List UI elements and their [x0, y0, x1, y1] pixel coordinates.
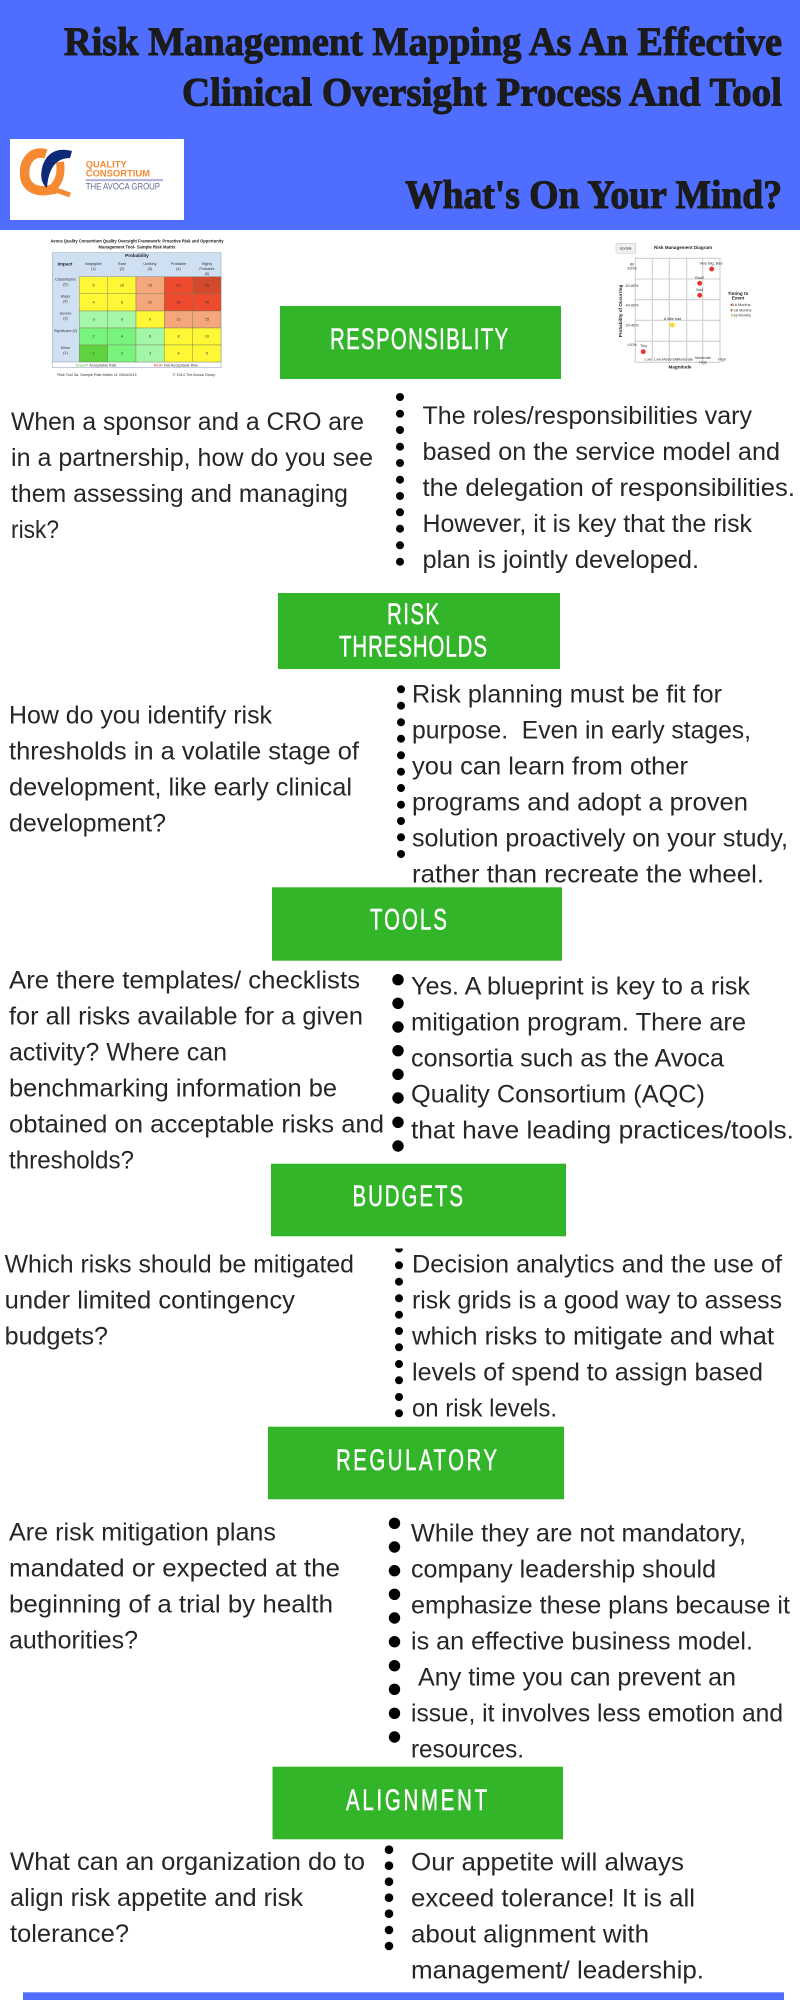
answer text: based on the service model and — [422, 438, 780, 466]
panel: risk thresholds Q and A — [9, 680, 788, 888]
dotted divider — [385, 1845, 393, 1950]
panel: budgets Q and A — [5, 1248, 782, 1422]
subtitle: What's On Your Mind? — [405, 172, 782, 217]
question text: authorities? — [9, 1627, 138, 1655]
answer text — [411, 1519, 790, 1763]
question text — [10, 1848, 365, 1948]
question text — [9, 966, 384, 1174]
risk matrix image: 4 — [121, 334, 123, 338]
risk management diagram image: High — [699, 360, 707, 364]
answer text: company leadership should — [411, 1555, 716, 1583]
risk matrix image: (1) — [91, 267, 97, 271]
dotted divider — [389, 1518, 400, 1743]
answer text: However, it is key that the risk — [422, 510, 752, 538]
answer text: you can learn from other — [412, 752, 688, 780]
answer text: The roles/responsibilities vary — [422, 402, 753, 430]
dotted divider — [397, 685, 405, 858]
section heading: Risk Thresholds: THRESHOLDS — [339, 631, 487, 664]
answer text: exceed tolerance! It is all — [411, 1885, 695, 1913]
title — [64, 19, 782, 115]
answer text: plan is jointly developed. — [422, 546, 699, 574]
risk management diagram image: 0-6 Months — [732, 303, 751, 307]
question text: beginning of a trial by health — [9, 1591, 333, 1619]
risk management diagram image: Tiny — [640, 344, 647, 348]
question text: benchmarking information be — [9, 1074, 337, 1102]
risk matrix image: Red= Not Acceptable Risk — [154, 363, 198, 367]
risk management diagram image: 100% — [627, 266, 637, 270]
risk matrix image: 3 — [92, 318, 95, 322]
risk management diagram image: Bad2 — [695, 276, 704, 280]
risk management diagram image: 40-60% — [625, 304, 639, 308]
section heading: Tools — [272, 887, 562, 961]
question text: How do you identify risk — [9, 701, 272, 729]
risk matrix image: 5 — [92, 284, 95, 288]
question text: thresholds in a volatile stage of — [9, 737, 359, 765]
risk management diagram image: Low Moderate — [654, 358, 678, 362]
risk matrix image: (4) — [176, 267, 182, 271]
risk matrix image: 2 — [121, 352, 123, 356]
risk matrix image: 1 — [92, 352, 95, 356]
risk management diagram image: 80 — [630, 262, 634, 266]
answer text: that have leading practices/tools. — [411, 1116, 794, 1144]
risk matrix image: 20 — [205, 300, 209, 304]
risk matrix image: (4) — [63, 300, 69, 304]
panel: tools Q and A — [9, 966, 794, 1174]
question text: Are there templates/ checklists — [9, 966, 360, 994]
section heading: Risk Thresholds — [278, 593, 560, 669]
risk matrix image: Unlikely — [143, 262, 157, 266]
risk matrix image: Probability — [125, 253, 149, 258]
logo: Avoca Quality Consortium: CONSORTIUM — [86, 168, 150, 180]
question text: development, like early clinical — [9, 773, 352, 801]
answer text: Risk planning must be fit for — [412, 680, 722, 708]
section heading: Regulatory — [268, 1427, 564, 1499]
risk matrix image: 15 — [205, 318, 209, 322]
answer text: Our appetite will always — [411, 1849, 684, 1877]
risk matrix image: Green= Acceptable Risk — [76, 363, 117, 367]
risk management diagram image: >18 Months — [731, 314, 751, 318]
panel: responsibility Q and A — [11, 393, 795, 574]
risk matrix image: Major — [61, 294, 71, 298]
risk management diagram image: A little bad — [664, 317, 681, 321]
risk matrix image — [50, 239, 224, 377]
risk matrix image: 6 — [149, 334, 151, 338]
risk matrix image: 2 — [92, 334, 95, 338]
answer text — [422, 402, 795, 574]
question text: Are risk mitigation plans — [9, 1519, 276, 1547]
risk matrix image: Negligible — [85, 262, 102, 266]
risk matrix image: 4 — [92, 300, 95, 304]
risk management diagram image: Probability of Occurring — [618, 285, 623, 337]
logo: Avoca Quality Consortium: QUALITY — [86, 159, 127, 170]
risk matrix image: Avoca Quality Consortium Quality Oversight Framework: Proactive Risk and Opportunity — [50, 239, 224, 244]
risk matrix image: (5) — [205, 272, 210, 276]
risk management diagram image: Timing to — [728, 291, 748, 296]
panel: alignment Q and A — [10, 1845, 704, 1985]
risk matrix image: (3) — [63, 316, 69, 320]
answer text: risk grids is a good way to assess — [412, 1286, 782, 1314]
risk matrix image: Probable — [171, 262, 186, 266]
section heading: Alignment — [272, 1767, 563, 1839]
question text: mandated or expected at the — [9, 1555, 340, 1583]
risk management diagram image: Risk Management Diagram — [654, 245, 712, 250]
risk management diagram image: Bad — [696, 288, 703, 292]
answer text: solution proactively on your study, — [412, 824, 788, 852]
answer text: programs and adopt a proven — [412, 788, 748, 816]
answer text: which risks to mitigate and what — [411, 1322, 774, 1350]
answer text: on risk levels. — [412, 1394, 557, 1422]
question text: them assessing and managing — [11, 480, 348, 508]
answer text: the delegation of responsibilities. — [422, 474, 795, 502]
answer text — [411, 1250, 782, 1422]
risk matrix image: (1) — [63, 351, 69, 355]
risk management diagram image: Low — [645, 358, 652, 362]
risk matrix image: 20 — [176, 284, 181, 288]
question text: in a partnership, how do you see — [11, 444, 373, 472]
answer text: Yes. A blueprint is key to a risk — [411, 972, 750, 1000]
risk matrix image: 16 — [176, 300, 181, 304]
risk management diagram image: High — [718, 358, 726, 362]
section heading: Responsibility — [280, 306, 561, 379]
risk management diagram image: Magnitude — [669, 364, 692, 370]
question text: When a sponsor and a CRO are — [11, 408, 364, 436]
section heading: Alignment: ALIGNMENT — [346, 1784, 487, 1817]
section heading: Budgets — [271, 1164, 566, 1236]
risk matrix image: 10 — [205, 334, 209, 338]
section heading: Budgets: BUDGETS — [352, 1180, 463, 1213]
question text — [5, 1250, 354, 1350]
risk matrix image: Impact — [58, 262, 73, 266]
section heading: Risk Thresholds: RISK — [387, 598, 439, 631]
section heading: Responsibility: RESPONSIBLITY — [330, 323, 508, 356]
dotted divider — [392, 974, 404, 1152]
question text — [11, 408, 373, 544]
risk matrix image: (5) — [63, 282, 69, 286]
answer text — [411, 1849, 704, 1985]
risk management diagram image: Moderate — [677, 358, 693, 362]
question text: risk? — [11, 516, 59, 544]
risk matrix image: 8 — [177, 334, 180, 338]
risk matrix image: Highly — [202, 262, 212, 266]
title: Risk Management Mapping As An Effective — [64, 19, 782, 64]
risk management diagram image: 6-18 Months — [730, 308, 752, 312]
answer text: consortia such as the Avoca — [411, 1044, 724, 1072]
risk management diagram image: 20-40% — [625, 324, 639, 328]
risk matrix image: 10 — [120, 284, 124, 288]
risk matrix image: 25 — [205, 284, 209, 288]
risk matrix image: 3 — [149, 352, 151, 356]
question text: budgets? — [5, 1322, 108, 1350]
question text: development? — [9, 809, 166, 837]
question text: for all risks available for a given — [9, 1002, 363, 1030]
answer text: levels of spend to assign based — [412, 1358, 763, 1386]
panel: regulatory Q and A — [9, 1518, 790, 1763]
logo: Avoca Quality Consortium: THE AVOCA GROUP — [86, 181, 160, 192]
question text — [9, 701, 359, 837]
risk matrix image: 4 — [177, 352, 180, 356]
header banner — [0, 0, 800, 230]
question text: activity? Where can — [9, 1038, 227, 1066]
risk management diagram image: Moderate — [695, 356, 711, 360]
risk matrix image: Rare — [118, 262, 126, 266]
risk matrix image: © 2014 The Avoca Group — [173, 373, 215, 377]
risk matrix image: Management Tool- Sample Risk Matrix — [98, 244, 176, 250]
risk matrix image: Risk Tool 3a: Sample Risk Matrix v1 030ct2014 — [57, 373, 137, 377]
answer text: issue, it involves less emotion and — [411, 1699, 783, 1727]
risk management diagram image: <20% — [627, 343, 638, 347]
risk matrix image: 15 — [148, 284, 152, 288]
risk matrix image: (3) — [148, 267, 153, 271]
question text: under limited contingency — [5, 1286, 296, 1314]
question text: obtained on acceptable risks and — [9, 1110, 384, 1138]
risk management diagram image: 60-80% — [625, 284, 639, 288]
answer text: management/ leadership. — [411, 1957, 704, 1985]
answer text: is an effective business model. — [411, 1627, 753, 1655]
answer text: While they are not mandatory, — [411, 1519, 746, 1547]
risk management diagram image: Update — [620, 246, 632, 250]
footer bar — [23, 1992, 784, 2000]
risk matrix image: Minor — [61, 346, 71, 350]
answer text: resources. — [411, 1735, 524, 1763]
section heading: Tools: TOOLS — [370, 904, 447, 936]
risk matrix image: Catastrophic — [55, 278, 76, 282]
question text: Which risks should be mitigated — [5, 1250, 354, 1278]
answer text — [411, 972, 794, 1144]
risk matrix image: 12 — [148, 300, 152, 304]
risk matrix image: Significant (2) — [54, 329, 78, 333]
dotted divider — [396, 393, 404, 566]
answer text: Decision analytics and the use of — [412, 1250, 782, 1278]
section heading: Regulatory: REGULATORY — [336, 1444, 497, 1477]
risk matrix image: 9 — [149, 318, 151, 322]
risk matrix image: (2) — [120, 267, 125, 271]
logo: Avoca Quality Consortium — [10, 139, 184, 220]
answer text: mitigation program. There are — [411, 1008, 746, 1036]
question text: What can an organization do to — [10, 1848, 365, 1876]
answer text: about alignment with — [411, 1921, 649, 1949]
question text — [9, 1519, 340, 1655]
risk matrix image: Probable — [199, 267, 215, 271]
title: Clinical Oversight Process And Tool — [182, 70, 782, 115]
answer text: rather than recreate the wheel. — [412, 860, 764, 888]
question text: align risk appetite and risk — [10, 1884, 303, 1912]
risk matrix image: Severe — [59, 312, 72, 316]
risk management diagram image — [616, 243, 752, 370]
question text: thresholds? — [9, 1146, 134, 1174]
risk matrix image: 12 — [176, 318, 181, 322]
answer text: emphasize these plans because it — [411, 1591, 790, 1619]
dotted divider — [395, 1248, 403, 1417]
answer text: purpose. Even in early stages, — [412, 716, 751, 744]
answer text: Any time you can prevent an — [418, 1663, 736, 1691]
risk matrix image: 6 — [121, 318, 123, 322]
risk matrix image: 5 — [206, 352, 208, 356]
risk management diagram image: Very Big, Bad — [699, 262, 723, 266]
question text: tolerance? — [10, 1920, 129, 1948]
answer text — [412, 680, 788, 888]
risk matrix image: 8 — [121, 300, 123, 304]
answer text: Quality Consortium (AQC) — [411, 1080, 705, 1108]
risk management diagram image: Event — [732, 296, 745, 300]
